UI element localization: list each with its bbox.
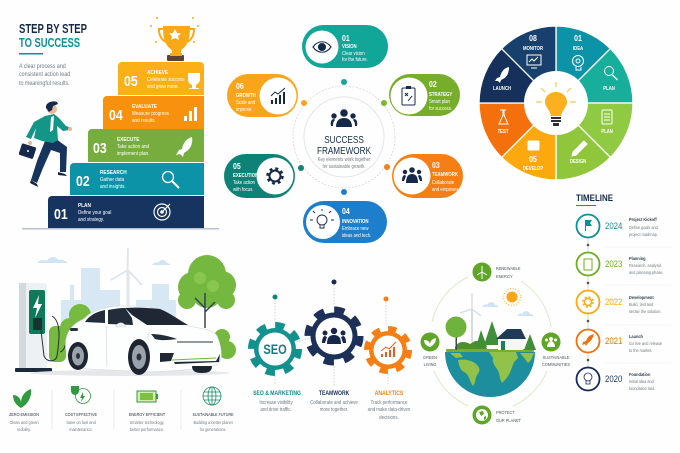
node: protect our planet: OUR PLANET bbox=[496, 418, 521, 423]
step 05 achieve: ACHIEVE bbox=[147, 70, 169, 76]
feature: sustainable future: for generations. bbox=[200, 427, 226, 432]
pill 05 execution: EXECUTION bbox=[233, 173, 259, 179]
node: renewable energy bbox=[472, 262, 521, 282]
milestone 2022: iterate the solution. bbox=[629, 309, 661, 314]
milestone 2024: Project Kickoff bbox=[629, 217, 657, 222]
milestone 2023 bbox=[576, 252, 664, 276]
step 02 research: RESEARCH bbox=[100, 170, 127, 176]
node: green living bbox=[420, 332, 440, 367]
icon: rocket bbox=[176, 137, 192, 157]
panel: sustainability earth bbox=[420, 262, 570, 424]
step 01 plan: PLAN bbox=[78, 203, 91, 209]
title: STEP BY STEP bbox=[19, 21, 87, 36]
pill 05 execution: with focus. bbox=[233, 187, 253, 193]
feature: zero emission: Clean and green bbox=[10, 420, 39, 425]
step 04 evaluate: Measure progress bbox=[132, 111, 169, 117]
feature: zero emission bbox=[9, 389, 39, 432]
house bbox=[496, 329, 526, 350]
milestone 2021: 2021 bbox=[605, 335, 622, 346]
milestone 2024: 2024 bbox=[605, 220, 622, 231]
pill 04 innovation: 04 bbox=[342, 206, 350, 216]
timeline title: TIMELINE bbox=[576, 193, 613, 203]
feature: energy efficient: better performance. bbox=[130, 427, 164, 432]
pill 01 vision: VISION bbox=[342, 44, 357, 50]
gear labels bbox=[253, 391, 411, 421]
pill 05 execution: Take action bbox=[233, 180, 255, 186]
center lightbulb bbox=[524, 71, 588, 135]
sun and clouds bbox=[482, 288, 534, 316]
pill 03 teamwork: Collaborate bbox=[432, 180, 454, 186]
wheel labels: PLAN bbox=[601, 129, 613, 135]
pill 01 vision: Clear vision bbox=[342, 51, 365, 57]
pill 04 innovation bbox=[303, 201, 387, 243]
pill 06 growth: improve. bbox=[236, 107, 253, 113]
pill 06 growth: 06 bbox=[236, 81, 244, 91]
orbit rings bbox=[293, 86, 395, 188]
title: TO SUCCESS bbox=[19, 35, 80, 50]
feature: energy efficient: ENERGY EFFICIENT bbox=[129, 412, 166, 417]
wheel labels: MONITOR bbox=[523, 46, 544, 52]
ring arcs bbox=[432, 277, 551, 406]
feature: cost effective: COST EFFECTIVE bbox=[65, 412, 97, 417]
node: renewable energy: RENEWABLE bbox=[496, 266, 521, 271]
intro text: to meaningful results. bbox=[19, 81, 70, 87]
step 03 execute: implement plan. bbox=[117, 151, 149, 157]
step 01 plan: and strategy. bbox=[78, 217, 104, 223]
gear labels: TEAMWORK bbox=[319, 391, 350, 397]
icon: eye bbox=[313, 42, 331, 52]
bushes bbox=[49, 304, 91, 362]
pill 02 strategy: for success. bbox=[429, 106, 452, 112]
wind turbine bbox=[111, 248, 142, 306]
pill 02 strategy: 02 bbox=[429, 79, 437, 89]
milestone 2020 bbox=[576, 368, 655, 391]
step 05 achieve: Celebrate success bbox=[147, 77, 185, 83]
gear labels: Increase visibility bbox=[259, 400, 293, 406]
panel: step by step to success bbox=[18, 17, 219, 230]
feature: cost effective bbox=[65, 386, 97, 432]
step 05 achieve: and grow more. bbox=[147, 84, 179, 90]
center hub bbox=[317, 109, 371, 170]
center hub: SUCCESS bbox=[324, 134, 364, 145]
pill 03 teamwork bbox=[392, 154, 463, 198]
step 03 execute: EXECUTE bbox=[117, 137, 140, 143]
wheel labels: IDEA bbox=[573, 46, 584, 52]
gear: seo: SEO bbox=[263, 342, 287, 357]
pill 02 strategy: Smart plan bbox=[429, 99, 450, 105]
step 04 evaluate bbox=[103, 96, 204, 129]
gear: seo bbox=[252, 294, 298, 372]
connector pins bbox=[275, 285, 388, 386]
milestone 2021 bbox=[576, 330, 663, 353]
gear: teamwork bbox=[308, 280, 360, 362]
wheel segments bbox=[479, 26, 633, 180]
car bbox=[30, 306, 230, 376]
wind turbine bbox=[460, 293, 481, 342]
step 03 execute bbox=[88, 129, 204, 162]
step 02 research: 02 bbox=[76, 173, 90, 189]
wheel labels: LAUNCH bbox=[493, 86, 512, 92]
title bbox=[19, 21, 87, 50]
pill 06 growth: Scale and bbox=[236, 100, 256, 106]
center hub: Key elements work together bbox=[318, 157, 371, 163]
pill 06 growth bbox=[227, 74, 298, 117]
wheel icons bbox=[495, 55, 618, 156]
pill 04 innovation: INNOVATION bbox=[342, 219, 369, 225]
wheel labels: TEST bbox=[498, 129, 509, 135]
milestone 2022: 2022 bbox=[605, 296, 622, 307]
feature: zero emission: ZERO EMISSION bbox=[9, 412, 39, 417]
step 04 evaluate: and results. bbox=[132, 118, 156, 124]
milestone 2021: to the market. bbox=[629, 348, 652, 353]
wheel labels: 08 bbox=[529, 33, 538, 43]
milestone 2020: foundation laid. bbox=[629, 386, 655, 391]
feature: cost effective: Save on fuel and bbox=[66, 420, 96, 425]
feature: sustainable future bbox=[192, 387, 234, 432]
milestone 2020: 2020 bbox=[605, 373, 622, 384]
pill 06 growth: GROWTH bbox=[236, 93, 256, 99]
icon: trophy bbox=[150, 17, 199, 61]
gear labels: ANALYTICS bbox=[375, 391, 403, 397]
step 05 achieve bbox=[118, 62, 204, 95]
milestone 2024 bbox=[576, 214, 658, 238]
panel: electric vehicle charging bbox=[9, 248, 236, 432]
center hub: FRAMEWORK bbox=[317, 145, 371, 156]
icon: people bbox=[331, 109, 357, 127]
pill 01 vision bbox=[302, 25, 388, 68]
feature: cost effective: maintenance. bbox=[69, 427, 93, 432]
step 01 plan: Define your goal bbox=[78, 210, 111, 216]
gear labels: and make data-driven bbox=[368, 407, 411, 413]
panel: success framework bbox=[224, 25, 463, 243]
node: renewable energy: ENERGY bbox=[496, 274, 513, 279]
panel: gears bbox=[252, 280, 411, 421]
step 02 research: and insights. bbox=[100, 184, 126, 190]
pill 05 execution: 05 bbox=[233, 161, 241, 171]
icon: clipboard bbox=[402, 88, 415, 105]
feature: sustainable future: Building a better planet bbox=[193, 420, 233, 425]
icon: target bbox=[154, 204, 170, 220]
wheel labels: 01 bbox=[574, 33, 583, 43]
feature: sustainable future: SUSTAINABLE FUTURE bbox=[192, 412, 234, 417]
step 01 plan: 01 bbox=[54, 206, 68, 222]
icon: magnifier bbox=[162, 172, 179, 188]
pill 04 innovation: Embrace new bbox=[342, 226, 369, 232]
icon: team bbox=[402, 167, 422, 183]
car wheels bbox=[68, 339, 212, 375]
intro text: A clear process and bbox=[19, 64, 66, 70]
step 04 evaluate: 04 bbox=[109, 107, 123, 123]
milestone 2024: project roadmap. bbox=[629, 232, 658, 237]
milestone 2024: Define goals and bbox=[629, 225, 658, 230]
gear labels: Collaborate and achieve bbox=[310, 400, 358, 406]
milestone 2021: Go live and release bbox=[629, 341, 663, 346]
node: green living: GREEN bbox=[423, 355, 437, 360]
feature: zero emission: mobility. bbox=[17, 427, 31, 432]
node: sustainable communities: COMMUNITIES bbox=[542, 362, 570, 367]
milestone 2020: Foundation bbox=[629, 372, 651, 377]
pill 02 strategy bbox=[389, 74, 460, 116]
node: protect our planet bbox=[472, 406, 521, 424]
pill 02 strategy: STRATEGY bbox=[429, 92, 453, 98]
wheel labels: DEVELOP bbox=[523, 166, 543, 172]
illustration: businessman climbing steps bbox=[18, 101, 72, 187]
intro text: consistent action lead bbox=[19, 72, 70, 78]
clouds bbox=[37, 257, 170, 265]
milestone 2023: and planning phase. bbox=[629, 270, 664, 275]
feature: energy efficient: Smarter technology, bbox=[130, 420, 164, 425]
milestone 2023: Research, analysis bbox=[629, 263, 661, 268]
tree bbox=[178, 255, 236, 359]
node: protect our planet: PROTECT bbox=[496, 410, 515, 415]
gear labels: decisions. bbox=[379, 415, 399, 421]
milestone 2022 bbox=[576, 290, 661, 314]
pill 03 teamwork: 03 bbox=[432, 160, 440, 170]
step 05 achieve: 05 bbox=[124, 73, 138, 89]
milestone 2023: 2023 bbox=[605, 258, 622, 269]
gear: analytics bbox=[367, 296, 409, 371]
node: sustainable communities bbox=[542, 332, 570, 367]
icon: growth chart bbox=[271, 88, 285, 104]
step 02 research bbox=[70, 163, 204, 195]
icon: lightbulb bbox=[310, 209, 334, 228]
wheel labels bbox=[493, 33, 615, 172]
pill 03 teamwork: and empower. bbox=[432, 187, 459, 193]
step 04 evaluate: EVALUATE bbox=[132, 104, 157, 110]
pill 04 innovation: ideas and tech. bbox=[342, 233, 371, 239]
orbit dots bbox=[298, 79, 390, 195]
milestone 2023: Planning bbox=[629, 256, 646, 261]
milestone 2021: Launch bbox=[629, 334, 643, 339]
milestone 2020: Initial idea and bbox=[629, 379, 654, 384]
gear labels: SEO & MARKETING bbox=[253, 391, 302, 397]
city skyline bbox=[61, 268, 176, 340]
step 01 plan bbox=[48, 196, 204, 228]
intro text bbox=[19, 64, 70, 87]
pill 01 vision: for the future. bbox=[342, 57, 368, 63]
step 03 execute: Take action and bbox=[117, 144, 149, 150]
wheel labels: 05 bbox=[529, 154, 538, 164]
node: green living: LIVING bbox=[424, 362, 437, 367]
milestone 2022: Build, test and bbox=[629, 302, 654, 307]
pill 01 vision: 01 bbox=[342, 33, 350, 43]
feature: energy efficient bbox=[129, 391, 166, 432]
panel: timeline bbox=[576, 193, 671, 391]
charging station bbox=[15, 283, 70, 372]
gear labels: Track performance bbox=[371, 400, 408, 406]
icon: team bbox=[322, 328, 346, 344]
wheel labels: DESIGN bbox=[570, 159, 587, 165]
center hub: for sustainable growth. bbox=[323, 164, 365, 170]
icon: gear bbox=[268, 168, 282, 184]
step 02 research: Gather data bbox=[100, 177, 124, 183]
node: sustainable communities: SUSTAINABLE bbox=[543, 355, 569, 360]
panel: process wheel bbox=[479, 26, 633, 180]
globe bbox=[445, 352, 535, 397]
wheel labels: PLAN bbox=[603, 86, 615, 92]
milestone 2022: Development bbox=[629, 295, 654, 300]
ground with trees and house bbox=[446, 316, 536, 352]
pill 03 teamwork: TEAMWORK bbox=[432, 172, 458, 178]
gear labels: more together. bbox=[320, 407, 348, 413]
gear labels: and drive traffic. bbox=[260, 407, 292, 413]
pill 05 execution bbox=[224, 154, 295, 198]
step 03 execute: 03 bbox=[93, 140, 107, 156]
